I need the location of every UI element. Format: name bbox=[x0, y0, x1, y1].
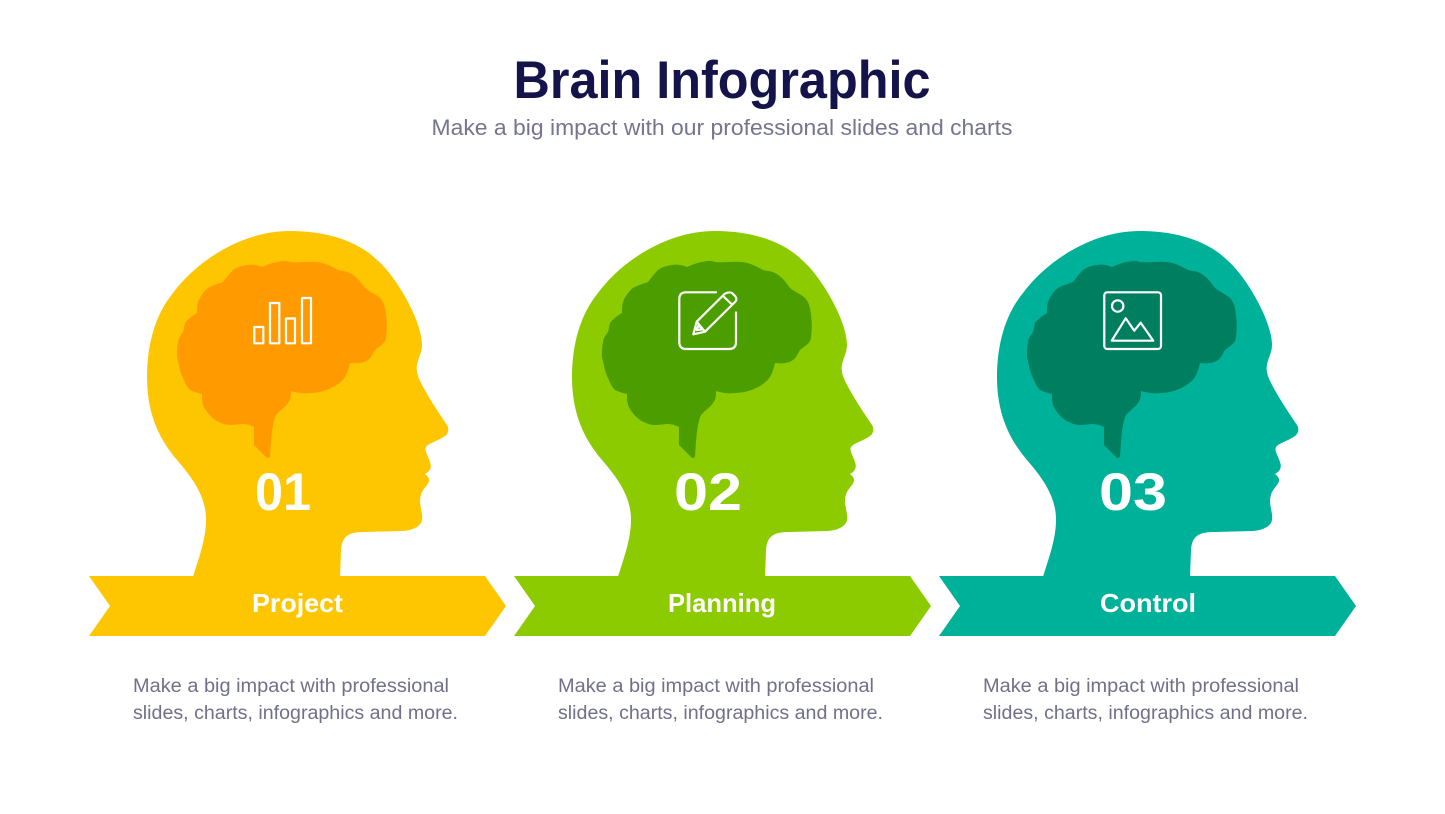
head silhouette bbox=[997, 231, 1298, 577]
description: slides, charts, infographics and more. bbox=[133, 703, 458, 724]
description: slides, charts, infographics and more. bbox=[558, 703, 883, 724]
head silhouette bbox=[147, 231, 448, 577]
description: Make a big impact with professional bbox=[133, 676, 449, 697]
description: Make a big impact with professional bbox=[558, 676, 874, 697]
title: Brain Infographic bbox=[514, 51, 930, 110]
icon: pencil and note bbox=[679, 292, 736, 349]
brain bbox=[602, 261, 812, 458]
panel: planning bbox=[514, 231, 931, 724]
subtitle: Make a big impact with our professional slides and charts bbox=[432, 115, 1013, 140]
head silhouette bbox=[572, 231, 873, 577]
panel: control bbox=[939, 231, 1356, 724]
description: slides, charts, infographics and more. bbox=[983, 703, 1308, 724]
label: Control bbox=[1100, 588, 1196, 618]
description: Make a big impact with professional bbox=[983, 676, 1299, 697]
icon: image bbox=[1104, 292, 1161, 349]
number: 02 bbox=[674, 463, 742, 522]
label: Project bbox=[252, 588, 343, 618]
icon: bar chart bbox=[254, 298, 311, 343]
number: 03 bbox=[1099, 463, 1167, 522]
brain bbox=[177, 261, 387, 458]
panel: project bbox=[89, 231, 506, 724]
label: Planning bbox=[668, 588, 776, 618]
number: 01 bbox=[255, 463, 311, 522]
arrow banner bbox=[939, 576, 1356, 636]
arrow banner bbox=[514, 576, 931, 636]
brain bbox=[1027, 261, 1237, 458]
arrow banner bbox=[89, 576, 506, 636]
